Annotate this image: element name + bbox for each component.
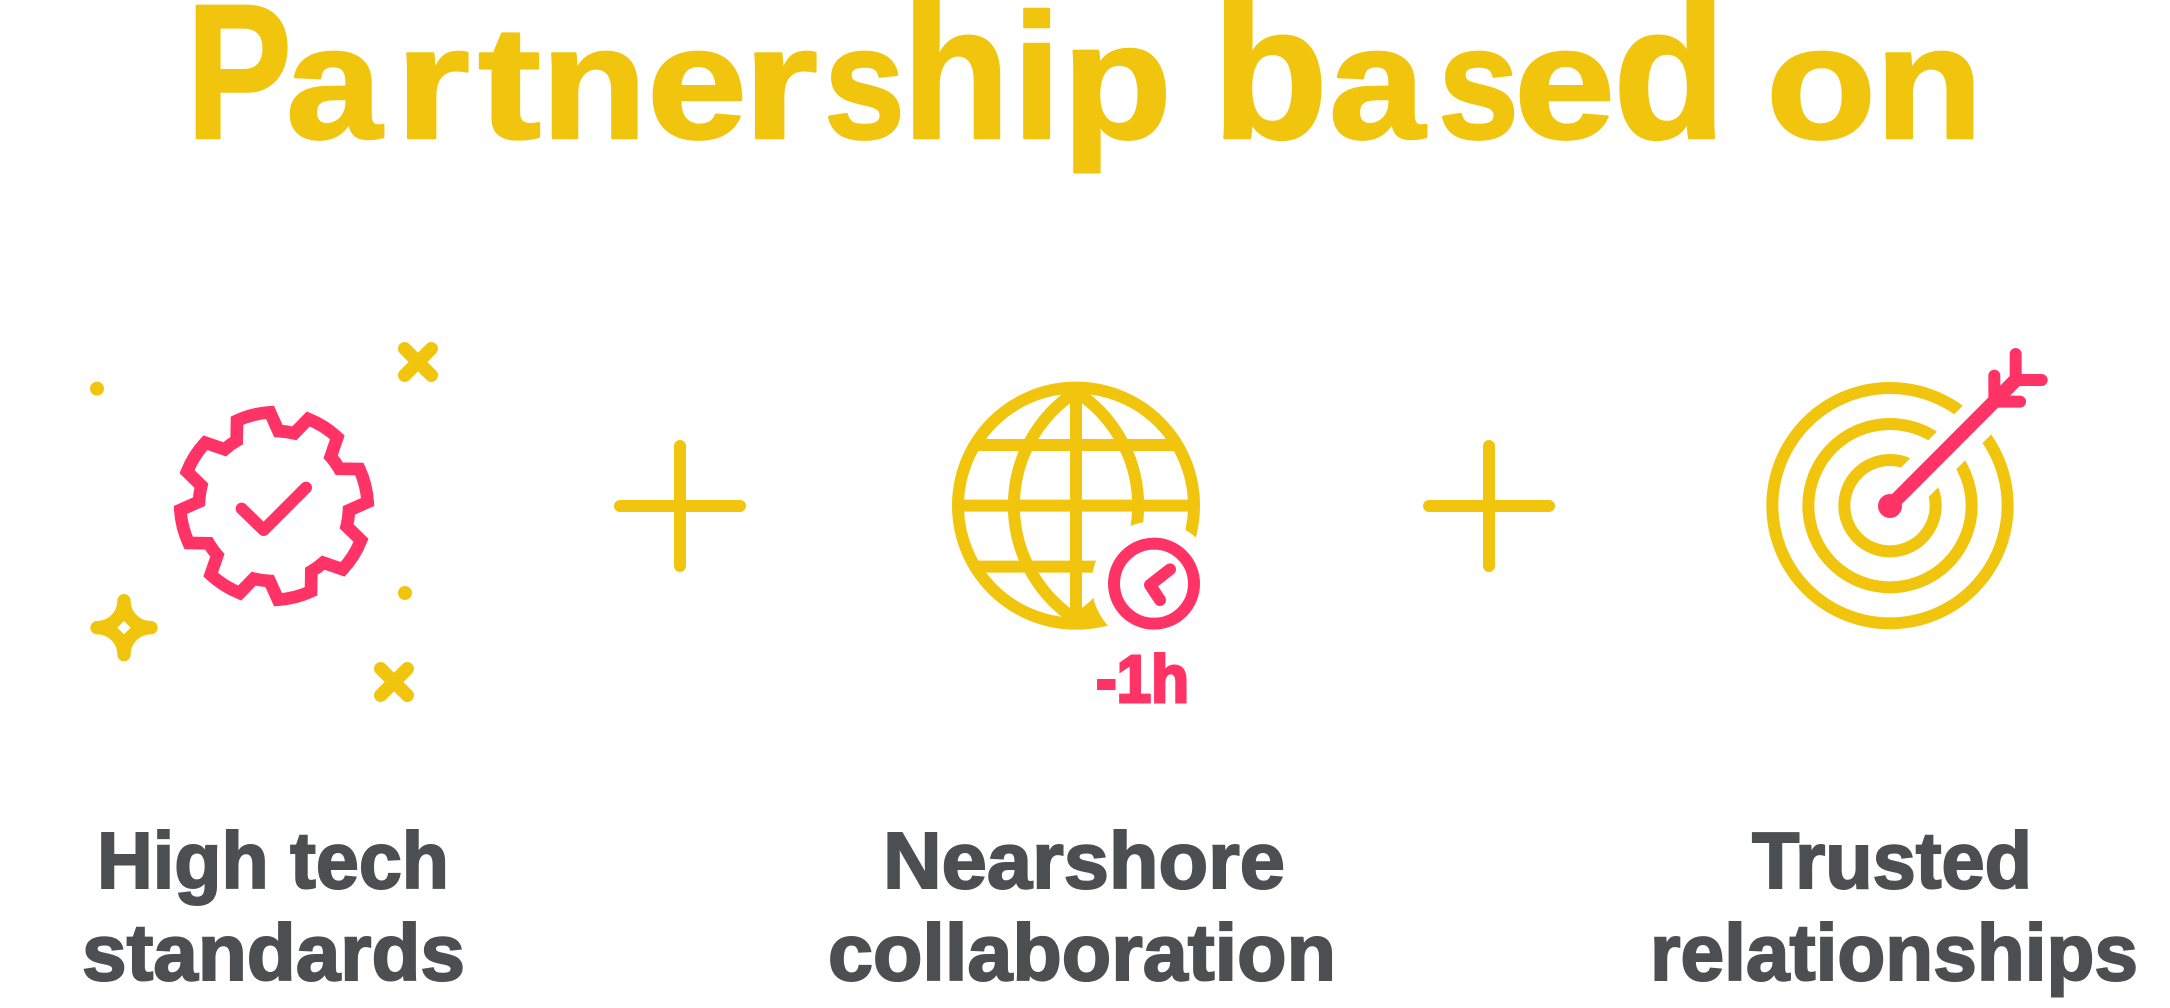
label: high tech standards: High tech (97, 816, 449, 905)
clock cutout (1092, 521, 1216, 646)
icon: target with arrow (1772, 354, 2042, 623)
time difference label: -1h (1096, 642, 1189, 717)
plus sign 1 (620, 446, 740, 566)
check mark (242, 488, 306, 530)
icon: globe with clock (958, 388, 1216, 646)
gear outline (180, 412, 368, 600)
arrow (1878, 354, 2042, 518)
clock (1114, 544, 1194, 624)
title (186, 0, 1983, 179)
ring gap (1891, 373, 2024, 506)
icon: gear with check and sparkles (90, 349, 431, 695)
label: nearshore collaboration (828, 816, 1336, 997)
label: high tech standards (82, 816, 465, 997)
sparkle decorations (90, 349, 431, 695)
label: nearshore collaboration: Nearshore (883, 816, 1285, 905)
label: trusted relationships (1650, 816, 2138, 997)
globe (958, 388, 1194, 624)
label: trusted relationships: relationships (1650, 908, 2138, 997)
label: trusted relationships: Trusted (1752, 816, 2032, 905)
label: nearshore collaboration: collaboration (828, 908, 1336, 997)
plus sign 2 (1429, 446, 1549, 566)
label: high tech standards: standards (82, 908, 465, 997)
target rings (1772, 388, 2008, 623)
